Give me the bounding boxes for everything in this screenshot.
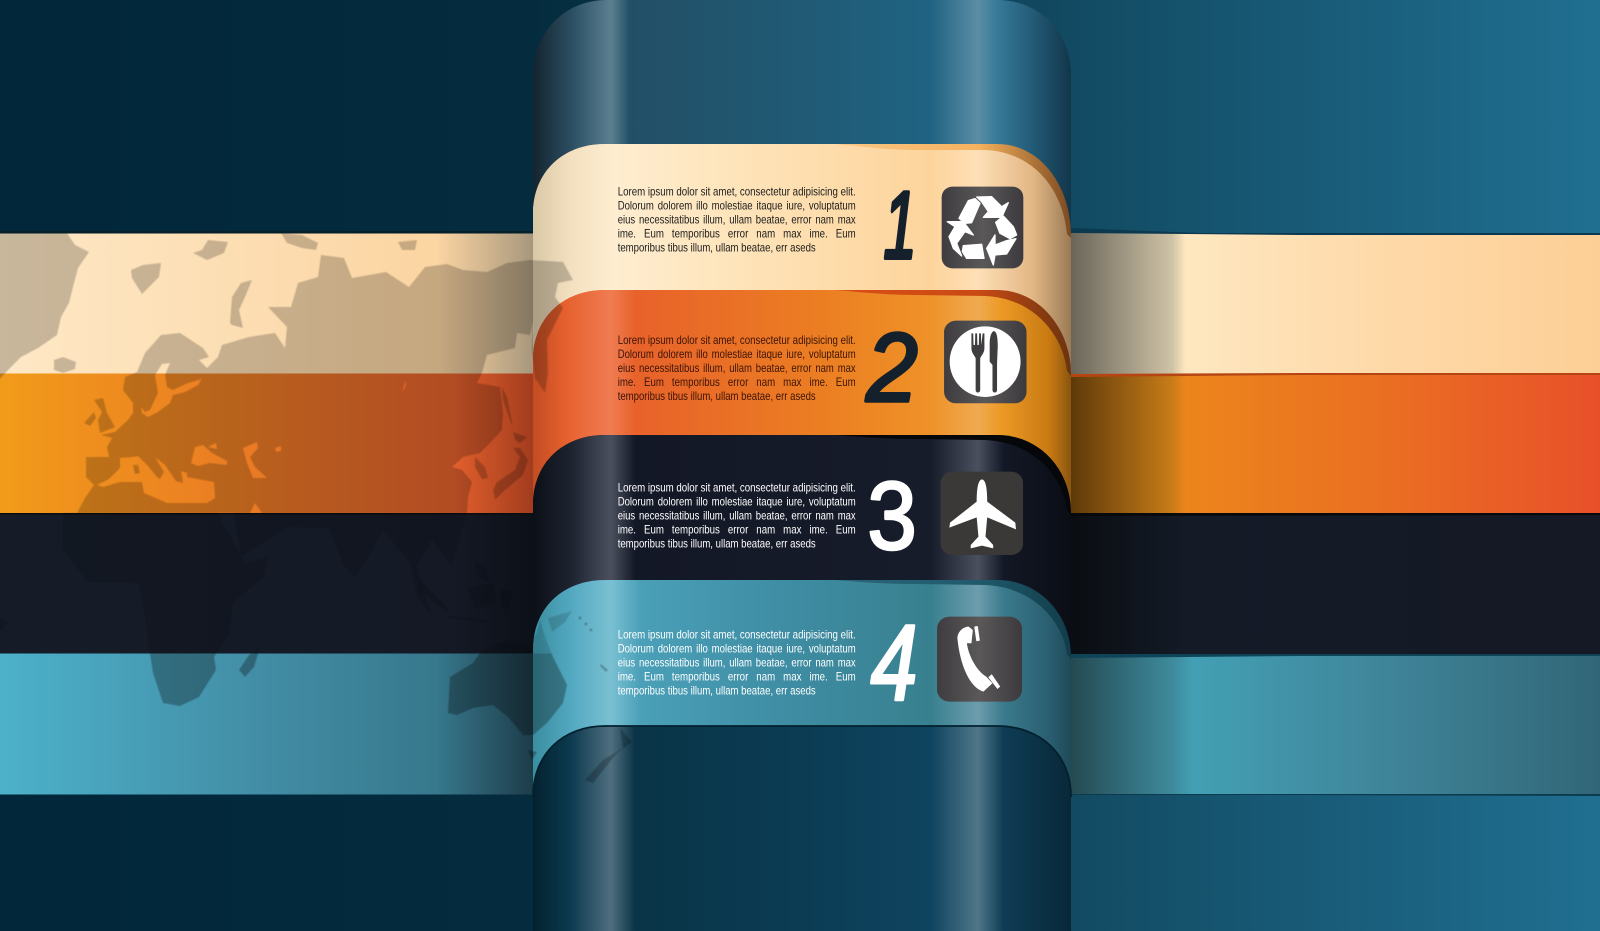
- band 4 rear lip: [533, 580, 1071, 760]
- band 3 text: Lorem ipsum dolor sit amet, consectetur adipisicing elit.: [618, 481, 856, 495]
- bottom arch face: [533, 726, 1071, 931]
- band 1 text: Dolorum dolorem illo molestiae itaque iure, voluptatum: [618, 198, 856, 212]
- band 2 text: temporibus tibus illum, ullam beatae, err aseds: [618, 389, 816, 403]
- panel: band 4: [533, 580, 1071, 860]
- band 4 text: eius necessitatibus illum, ullam beatae, error nam max: [618, 656, 856, 670]
- band 4 text: Lorem ipsum dolor sit amet, consectetur adipisicing elit.: [618, 628, 856, 642]
- number 2: 2: [865, 314, 918, 423]
- band 1 text: Lorem ipsum dolor sit amet, consectetur adipisicing elit.: [618, 184, 856, 198]
- band 1 text: eius necessitatibus illum, ullam beatae, error nam max: [618, 212, 856, 226]
- icon: fork and knife: [944, 321, 1027, 403]
- number 1: 1: [883, 171, 917, 278]
- panel: band 3: [533, 435, 1071, 720]
- band 1 rear lip: [533, 144, 1071, 300]
- band 2 text: ime. Eum temporibus error nam max ime. Eum: [618, 375, 856, 389]
- band 2 text: [618, 333, 856, 403]
- band 3 text: Dolorum dolorem illo molestiae itaque iure, voluptatum: [618, 495, 856, 509]
- band 3 text: ime. Eum temporibus error nam max ime. Eum: [618, 523, 856, 537]
- central column: [533, 0, 1071, 931]
- band 4 text: Dolorum dolorem illo molestiae itaque iure, voluptatum: [618, 642, 856, 656]
- map: southern land over teal: [150, 653, 567, 758]
- band 1 text: [618, 184, 856, 254]
- panel: band 2: [533, 290, 1071, 560]
- band 3 rear lip: [533, 435, 1071, 600]
- band 3 text: [618, 481, 856, 551]
- band 3 face: [533, 435, 1071, 720]
- band 2 text: eius necessitatibus illum, ullam beatae, error nam max: [618, 361, 856, 375]
- map: northern land: [0, 233, 573, 513]
- world map: [0, 233, 632, 783]
- band 4 text: [618, 628, 856, 698]
- band 3 text: temporibus tibus illum, ullam beatae, err aseds: [618, 537, 816, 551]
- band 1 text: ime. Eum temporibus error nam max ime. Eum: [618, 226, 856, 240]
- right stripes: [1071, 228, 1600, 796]
- number 3: 3: [867, 462, 917, 570]
- panel: bottom arch: [533, 726, 1071, 931]
- left stripes: [0, 231, 533, 794]
- band 1 face: [533, 144, 1071, 420]
- map: southern land: [0, 513, 572, 760]
- band 2 face: [533, 290, 1071, 560]
- panel: band 1: [533, 144, 1071, 420]
- icon: telephone: [937, 617, 1022, 702]
- band 1 text: temporibus tibus illum, ullam beatae, err aseds: [618, 240, 816, 254]
- band 2 rear lip: [533, 290, 1071, 440]
- bottom arch edge shadow: [533, 726, 1071, 797]
- band 3 text: eius necessitatibus illum, ullam beatae, error nam max: [618, 509, 856, 523]
- icon: airplane: [941, 472, 1023, 555]
- map: pacific islands and new zealand: [578, 616, 632, 783]
- band 4 face: [533, 580, 1071, 860]
- band 4 text: temporibus tibus illum, ullam beatae, err aseds: [618, 684, 816, 698]
- band 2 text: Lorem ipsum dolor sit amet, consectetur adipisicing elit.: [618, 333, 856, 347]
- number 4: 4: [871, 602, 917, 723]
- icon: recycle: [942, 187, 1023, 268]
- band 2 text: Dolorum dolorem illo molestiae itaque iure, voluptatum: [618, 347, 856, 361]
- band 4 text: ime. Eum temporibus error nam max ime. Eum: [618, 670, 856, 684]
